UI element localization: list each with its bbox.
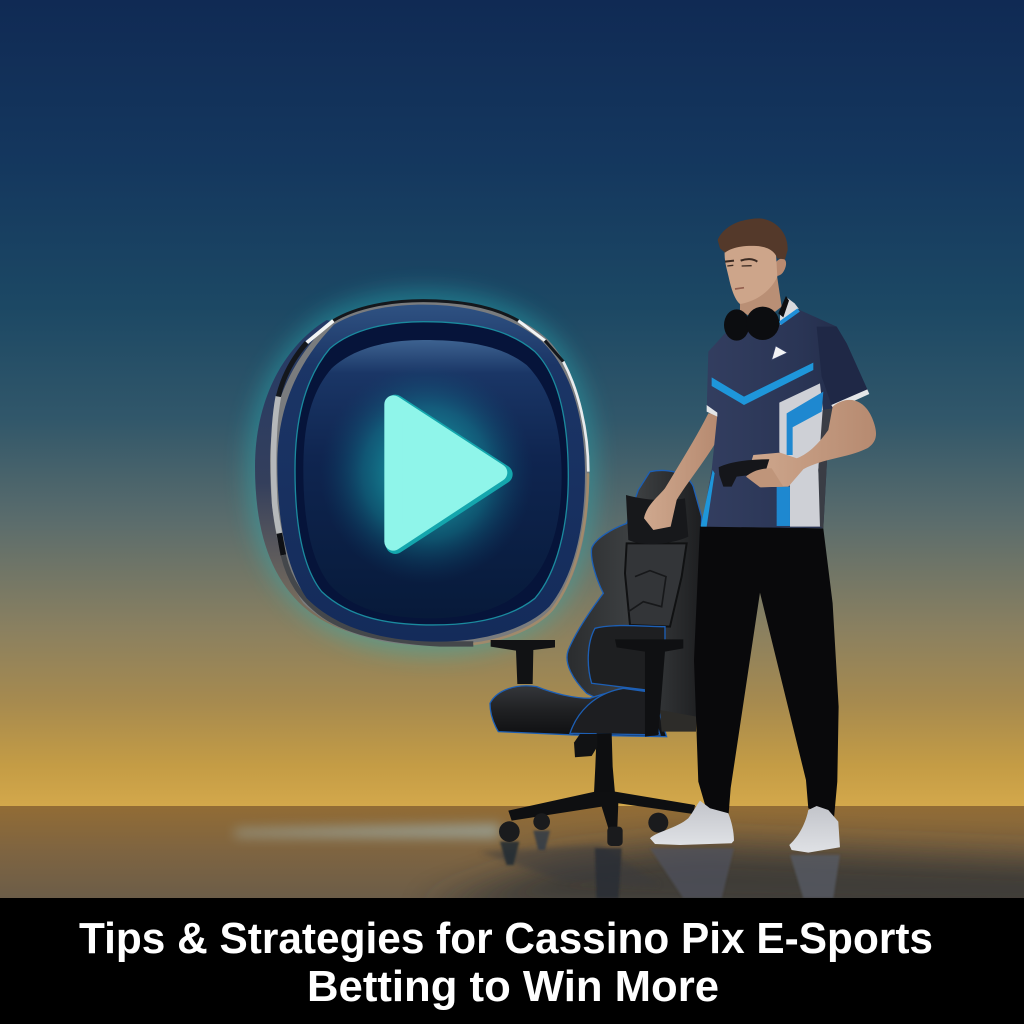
floor reflections bbox=[500, 831, 840, 898]
caption title bbox=[79, 914, 933, 1011]
gaming chair bbox=[490, 470, 702, 846]
jersey left stripe bbox=[701, 470, 715, 527]
floor bbox=[0, 806, 1024, 898]
recessed well bbox=[295, 322, 568, 625]
person legs and shoes bbox=[650, 526, 840, 853]
right arm bbox=[747, 400, 876, 487]
neck bbox=[740, 273, 782, 323]
black trousers bbox=[694, 526, 839, 818]
caption title: Betting to Win More bbox=[307, 962, 719, 1011]
chevron stripe bbox=[712, 363, 813, 405]
seat side bbox=[570, 688, 660, 735]
icon: glossy play button bbox=[247, 290, 597, 655]
metal ring segments bbox=[273, 301, 588, 644]
button side wall bbox=[255, 320, 440, 646]
jersey blue panel bbox=[787, 392, 823, 455]
button face bbox=[303, 340, 562, 618]
collar stripe bbox=[780, 310, 799, 323]
far armrest bbox=[491, 640, 555, 684]
sleeve shading bbox=[817, 327, 868, 408]
lumbar pillow bbox=[588, 626, 665, 690]
sleeve cuff bbox=[831, 389, 869, 410]
hair bbox=[718, 218, 788, 259]
caption bar bbox=[0, 898, 1024, 1024]
jersey bbox=[702, 309, 868, 528]
left shoe bbox=[650, 801, 734, 845]
jersey blue lower stripe bbox=[777, 487, 790, 526]
left arm bbox=[644, 413, 717, 530]
chair centre panel bbox=[625, 543, 687, 627]
collar bbox=[780, 297, 799, 325]
lower back wedge bbox=[660, 710, 697, 732]
seat lever bbox=[574, 734, 597, 757]
seat bbox=[490, 686, 667, 737]
eyes and brows bbox=[725, 259, 757, 289]
game controller bbox=[719, 459, 769, 487]
chair panel seam bbox=[628, 571, 666, 612]
right shoe bbox=[789, 806, 840, 853]
casters bbox=[499, 813, 668, 846]
person upper body bbox=[644, 218, 876, 530]
button rim bbox=[277, 305, 585, 642]
headrest pillow bbox=[626, 495, 688, 544]
left cuff bbox=[707, 405, 717, 417]
jersey logo bbox=[772, 346, 787, 360]
star base bbox=[508, 792, 695, 828]
near armrest bbox=[615, 639, 683, 737]
play triangle bbox=[393, 404, 503, 544]
headphones bbox=[724, 296, 789, 341]
metal ring bbox=[270, 300, 589, 646]
icon glow bbox=[247, 290, 597, 655]
jersey dark side bbox=[818, 408, 833, 528]
background wall bbox=[0, 0, 1024, 806]
face bbox=[725, 241, 777, 304]
jersey white panel bbox=[779, 383, 823, 527]
gas lift bbox=[594, 733, 615, 793]
ear bbox=[773, 259, 786, 276]
chair backrest bbox=[567, 470, 702, 723]
fingers bbox=[746, 468, 783, 487]
caption title: Tips & Strategies for Cassino Pix E-Sports bbox=[79, 914, 933, 963]
triangle glow bbox=[320, 363, 533, 583]
